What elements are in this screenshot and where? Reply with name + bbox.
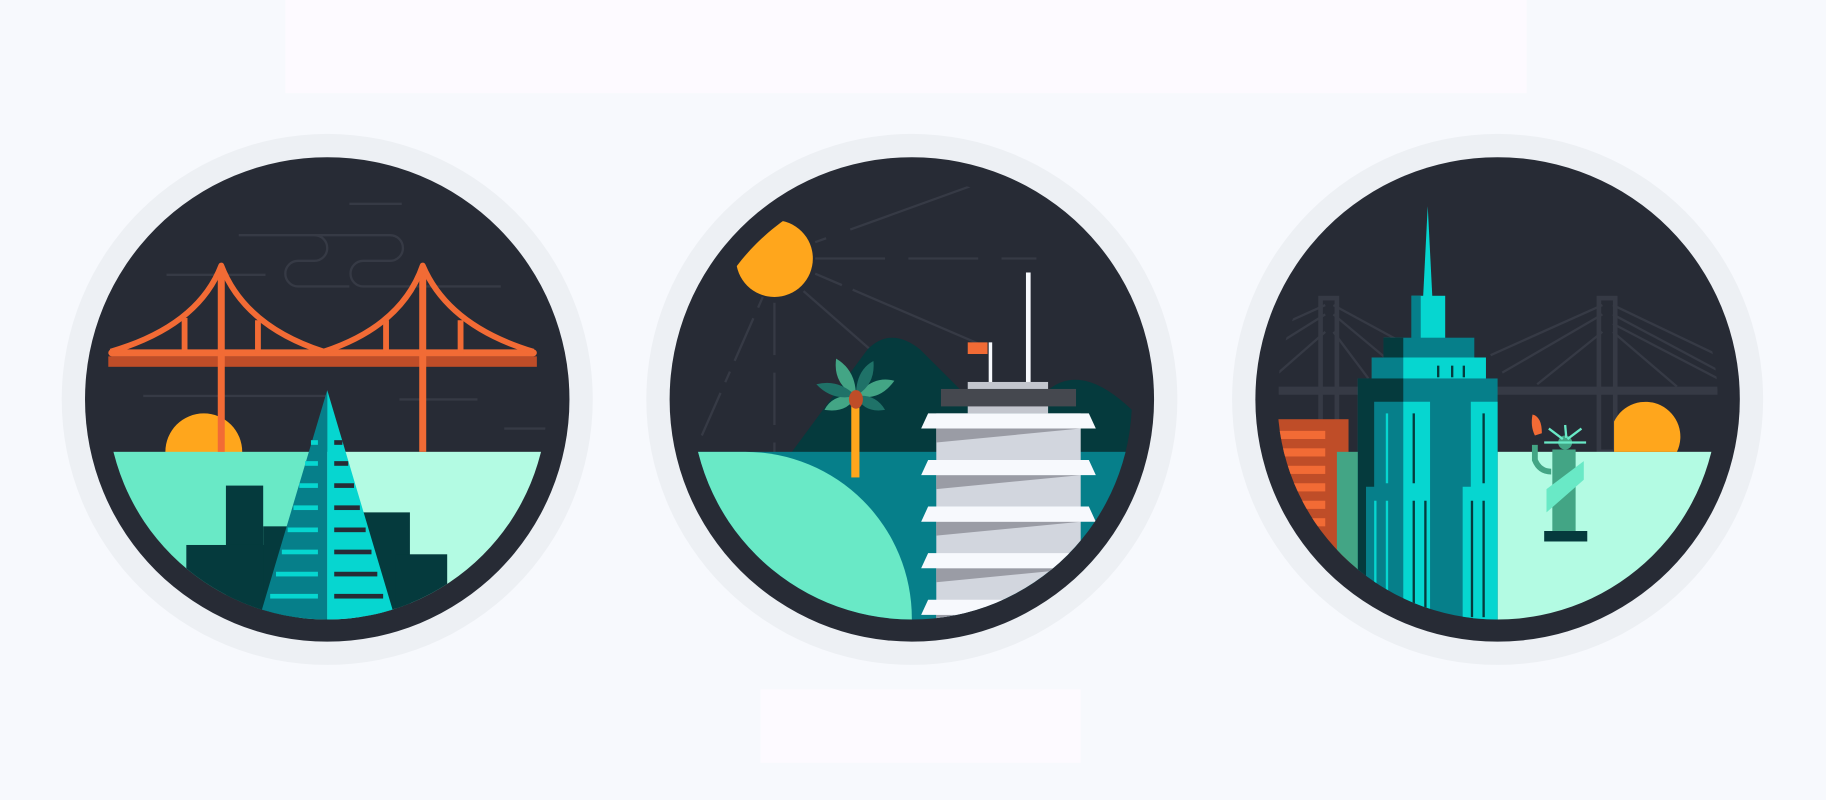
icon: sun bbox=[1614, 402, 1680, 452]
tower building bbox=[921, 272, 1096, 646]
water bbox=[698, 452, 1126, 620]
empire state building bbox=[1358, 206, 1498, 629]
mountains bbox=[792, 338, 1135, 452]
palm tree bbox=[816, 359, 894, 477]
panel: Los Angeles bbox=[646, 134, 1177, 699]
title placeholder box bbox=[285, 0, 1527, 93]
sun rays bbox=[699, 186, 1036, 454]
water bbox=[114, 452, 328, 620]
buildings bbox=[186, 486, 447, 629]
infographic canvas bbox=[62, 134, 1763, 664]
panel: New York bbox=[1232, 134, 1763, 685]
statue of liberty bbox=[1532, 415, 1587, 541]
orange building bbox=[1278, 419, 1360, 571]
caption placeholder box bbox=[760, 689, 1081, 763]
panel: San Francisco bbox=[62, 134, 593, 685]
green hill bbox=[698, 452, 912, 620]
icon: sun bbox=[736, 220, 813, 297]
golden gate bridge bbox=[108, 266, 537, 452]
pyramid tower bbox=[262, 390, 392, 620]
ground bbox=[1498, 452, 1712, 620]
bridge bbox=[1279, 298, 1718, 452]
icon: sun bbox=[165, 413, 242, 452]
